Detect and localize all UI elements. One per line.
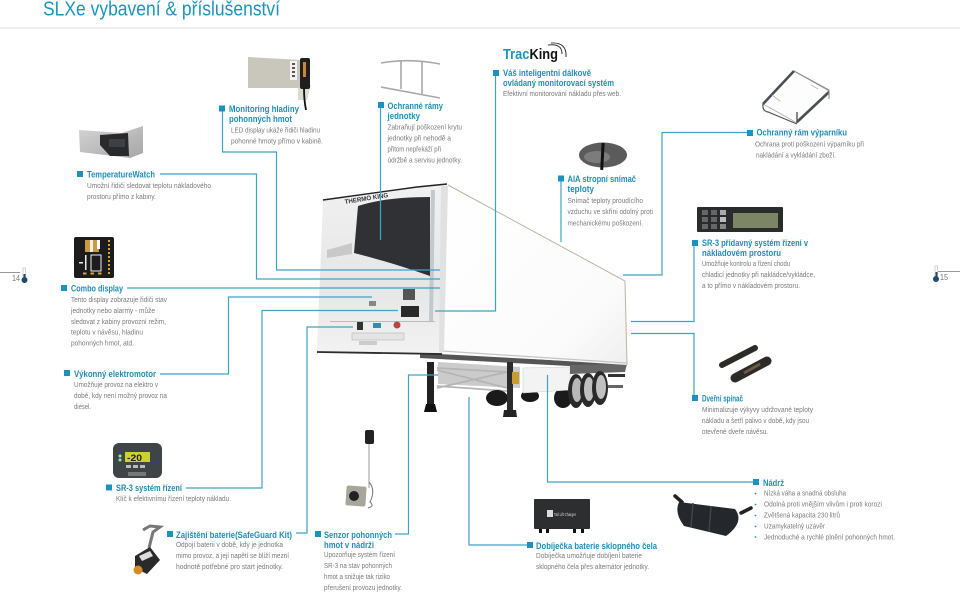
- callout: combo display: teplotu v návěsu, hladinu: [71, 328, 143, 336]
- callout: electric motor: [64, 369, 168, 411]
- callout: evaporator frame: [747, 128, 864, 160]
- callout: protective frames: údržbě a servisu jednotky.: [388, 156, 462, 164]
- callout: SR-3 remote control: chladicí jednotky při nakládce/vykládce,: [702, 270, 815, 279]
- leader: evaporator frame: [623, 132, 747, 275]
- callout: safeguard kit: Odpojí baterii v době, kdy je jednotka: [176, 540, 284, 549]
- callout: SR-3 control system: SR-3 systém řízení: [116, 483, 182, 494]
- callout: fuel level monitoring: [219, 104, 323, 146]
- leader: AIA sensor: [560, 178, 562, 242]
- callout: fuel sensor: [315, 530, 402, 592]
- callout: fuel level monitoring: Monitoring hladiny: [229, 104, 300, 115]
- callout: tank: Uzamykatelný uzávěr: [764, 522, 825, 530]
- callout: SR-3 remote control: nákladovém prostoru: [702, 248, 781, 259]
- callout: fuel sensor: Upozorňuje systém řízení: [324, 550, 396, 559]
- callout: fuel sensor: Senzor pohonných: [324, 530, 392, 541]
- callout: SR-3 remote control: [692, 238, 815, 290]
- icon: fuel monitoring plate: [248, 57, 311, 110]
- callout: protective frames: jednotky: [387, 111, 421, 122]
- callout: AIA sensor: mechanickému poškození.: [568, 218, 643, 228]
- icon: evaporator frame: [763, 71, 829, 124]
- callout: SR-3 remote control: Umožňuje kontrolu a řízení chodu: [702, 259, 790, 268]
- callout: TemperatureWatch: [77, 170, 211, 201]
- leader: SR-3 remote: [631, 243, 694, 322]
- icon: door switch: [722, 348, 767, 378]
- callout: fuel sensor: SR-3 na stav pohonných: [324, 561, 392, 570]
- refrigeration unit front: [317, 184, 448, 354]
- callout: tank: Nízká váha a snadná obsluha: [764, 488, 847, 498]
- trailer side wall: [442, 185, 627, 365]
- callout: evaporator frame: Ochranný rám výparníku: [756, 128, 847, 138]
- callout: tank: Zvětšená kapacita 230 litrů: [764, 510, 840, 520]
- callout: fuel sensor: přerušení provozu jednotky.: [324, 583, 402, 592]
- leader: temperature watch: [160, 174, 440, 279]
- callout: tail lift charger: Dobíječka umožňuje dobíjení baterie: [536, 551, 642, 560]
- callout: safeguard kit: [167, 530, 292, 571]
- callout: TracKing: Váš inteligentní dálkově: [503, 68, 591, 79]
- callout: combo display: pohonných hmot, atd.: [71, 338, 134, 348]
- leader: fuel sensor: [395, 375, 438, 534]
- callout: TemperatureWatch: TemperatureWatch: [87, 170, 155, 180]
- callout: protective frames: jednotky při nehodě a: [387, 134, 452, 142]
- callout: evaporator frame: nakládání a vykládání zboží.: [756, 150, 836, 160]
- callout: tank: Odolná proti vnějším vlivům i proti korozi: [764, 500, 882, 508]
- callout: electric motor: Umožňuje provoz na elektro v: [74, 380, 158, 389]
- icon: fuel tank sensor: [345, 430, 374, 508]
- callout: SR-3 control system: Klíč k efektivnímu řízení teploty nákladu.: [116, 494, 231, 503]
- callout: safeguard kit: mimo provoz, a její napětí se blíží mezní: [176, 551, 290, 560]
- callout: tank: [753, 478, 895, 542]
- leader: safeguard kit: [296, 327, 353, 533]
- page marker 15: [933, 266, 960, 282]
- callout: door switch: [692, 394, 813, 436]
- callout: combo display: Tento display zobrazuje řidiči stav: [71, 295, 167, 304]
- callout: fuel level monitoring: pohonných hmot: [229, 114, 293, 125]
- callout: TemperatureWatch: prostoru přímo z kabiny.: [87, 192, 156, 201]
- icon: SR-3 remote panel: [697, 207, 783, 232]
- callout: AIA sensor: AIA stropní snímač: [568, 174, 637, 185]
- icon: SR-3 controller: -20: [127, 453, 142, 464]
- leader: protective frames: [380, 105, 382, 240]
- icon: tail lift charger: [534, 499, 590, 533]
- icon: safeguard kit: [134, 526, 160, 574]
- icon: combo display: [74, 237, 114, 278]
- page marker 14: 14: [12, 274, 20, 283]
- leader: SR-3 control: [186, 310, 398, 488]
- callout: combo display: [61, 284, 167, 348]
- leader: electric motor: [160, 297, 372, 374]
- callout: tail lift charger: [527, 541, 658, 571]
- callout: SR-3 control system: [106, 483, 231, 503]
- refrigeration unit front: THERMO KING: [344, 192, 389, 206]
- callout: electric motor: době, kdy není možný provoz na: [74, 391, 168, 400]
- callout: TracKing: [493, 68, 621, 98]
- icon: protective frames: [381, 61, 440, 98]
- callout: door switch: Minimalizuje výkyvy udržované teploty: [702, 405, 813, 414]
- leader: tracking: [435, 72, 496, 311]
- callout: combo display: Combo display: [71, 284, 124, 294]
- callout: tank: Nádrž: [763, 478, 784, 489]
- callout: AIA sensor: [558, 174, 653, 228]
- callout: fuel sensor: hmot v nádrži: [324, 540, 374, 551]
- icon: TracKing logo: TracKing: [503, 47, 558, 63]
- callout: AIA sensor: vzduchu ve skříni odolný proti: [568, 207, 653, 216]
- callout: fuel level monitoring: pohonné hmoty přímo v kabině.: [231, 136, 323, 146]
- callout: protective frames: přitom nepřekáží při: [388, 144, 441, 154]
- icon: AIA ceiling sensor: [579, 142, 627, 170]
- callout: electric motor: diesel.: [74, 402, 91, 411]
- icon: temperature watch: [79, 126, 143, 158]
- callout: tail lift charger: Dobíječka baterie sklopného čela: [536, 541, 658, 552]
- leader lines: [127, 72, 753, 545]
- callout: tail lift charger: sklopného čela přes alternátor jednotky.: [536, 562, 649, 571]
- callout: protective frames: Ochranné rámy: [388, 101, 444, 112]
- leader: tank: [548, 375, 753, 482]
- leader: combo display: [127, 287, 440, 289]
- page marker 14: [0, 268, 28, 283]
- callout: protective frames: [378, 101, 462, 164]
- callout: combo display: jednotky nebo alarmy - může: [70, 306, 155, 315]
- leader: monitoring: [222, 111, 440, 270]
- trailer photo: [317, 184, 627, 417]
- icon: fuel tank: [675, 496, 751, 536]
- callout: AIA sensor: teploty: [568, 184, 595, 195]
- callout: door switch: Dveřní spínač: [702, 394, 743, 404]
- callout: SR-3 remote control: SR-3 přídavný systém řízení v: [702, 238, 809, 249]
- callout: SR-3 remote control: a to přímo v nákladovém prostoru.: [702, 281, 800, 290]
- leader: door switch: [631, 334, 694, 398]
- callout: electric motor: Výkonný elektromotor: [74, 369, 156, 380]
- callout: protective frames: Zabraňují poškození krytu: [388, 122, 462, 132]
- callout: tank: Jednoduché a rychlé plnění pohonných hmot.: [764, 532, 895, 542]
- callout: door switch: nákladu a šetří palivo v době, kdy jsou: [702, 416, 809, 425]
- callout: AIA sensor: Snímač teploty proudícího: [568, 196, 643, 205]
- page marker 15: 15: [940, 273, 948, 282]
- callout: fuel sensor: hmot a snižuje tak riziko: [324, 572, 390, 581]
- trailer chassis and wheels: [420, 353, 627, 417]
- callout: evaporator frame: Ochrana proti poškození výparníku při: [755, 140, 864, 148]
- callout: combo display: sledovat z kabiny provozní režim,: [71, 317, 166, 326]
- callout: safeguard kit: hodnotě potřebné pro start jednotky.: [176, 562, 283, 571]
- callout: safeguard kit: Zajištění baterie(SafeGuard Kit): [176, 530, 292, 541]
- callout: fuel level monitoring: LED display ukáže řidiči hladinu: [231, 126, 320, 134]
- icon: tail lift charger: Tail Lift Charger: [554, 512, 576, 517]
- leader: charger: [469, 397, 527, 545]
- callout: TemperatureWatch: Umožní řidiči sledovat teplotu nákladového: [87, 181, 211, 190]
- callout: TracKing: Efektivní monitorování nákladu přes web.: [503, 89, 621, 98]
- icon: SR-3 controller: [113, 443, 162, 478]
- callout: TracKing: ovládaný monitorovací systém: [503, 78, 614, 89]
- callout: door switch: otevřené dveře návěsu.: [702, 427, 768, 436]
